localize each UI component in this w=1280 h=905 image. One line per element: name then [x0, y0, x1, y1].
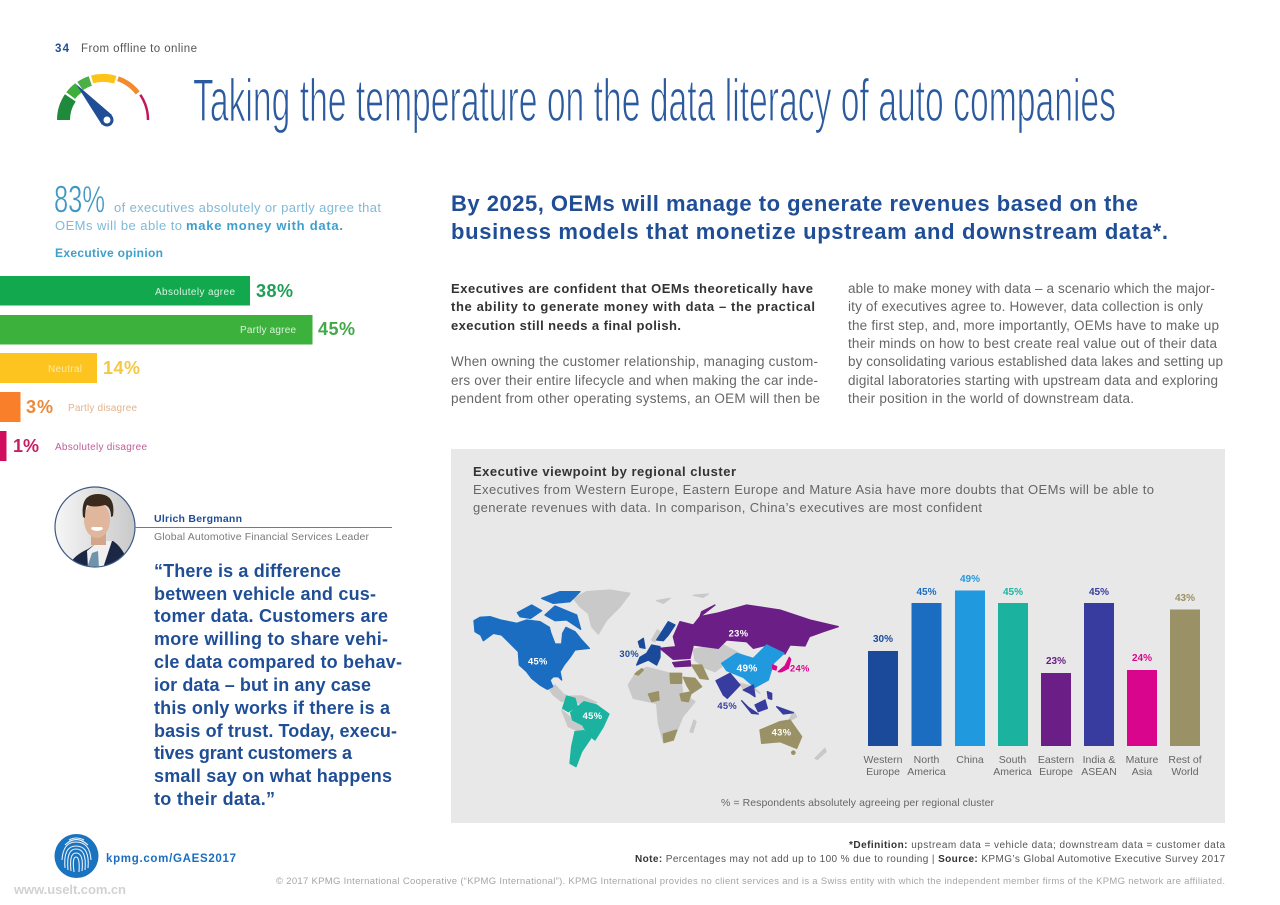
- copyright: © 2017 KPMG International Cooperative (“KPMG International”). KPMG International provides no client services and is a Swiss entity with which the independent member firms of the KPMG network are affiliated.: [276, 876, 1225, 887]
- bar: Mature Asia: [1127, 653, 1157, 746]
- body text: column 1: the ability to generate money with data – the practical: [451, 299, 815, 314]
- map labels: [528, 628, 810, 738]
- bar: Eastern Europe: [1041, 656, 1071, 746]
- body text: column 1: pendent from other operating systems, an OEM will then be: [451, 391, 820, 406]
- rest of world (grey): [547, 590, 826, 759]
- map labels: 49%: [737, 664, 758, 675]
- bar: absolutely disagree: Absolutely disagree: [55, 442, 147, 453]
- bar: Eastern Europe: 23%: [1046, 656, 1066, 667]
- eastern europe and russia: [660, 605, 838, 667]
- bar: partly agree: [0, 315, 355, 344]
- pull quote: between vehicle and cus-: [154, 584, 376, 604]
- pull quote: to their data.”: [154, 789, 275, 809]
- category labels: Europe: [1039, 766, 1073, 778]
- bar: North America: 45%: [916, 587, 937, 598]
- key statistic: OEMs will be able to: [55, 218, 182, 233]
- category labels: America: [907, 766, 946, 778]
- pull quote: basis of trust. Today, execu-: [154, 721, 397, 741]
- body text: column 2: by consolidating various established data lakes and setting up: [848, 354, 1223, 369]
- china: [722, 645, 784, 687]
- bar: partly disagree: 3%: [26, 397, 53, 417]
- world map: [474, 590, 838, 767]
- north america: [474, 592, 589, 689]
- bar: partly agree: Partly agree: [240, 325, 296, 336]
- pull quote: this only works if there is a: [154, 698, 391, 718]
- bar: North America: [912, 587, 942, 746]
- body text: column 2: their position in the world of downstream data.: [848, 391, 1134, 406]
- south america: [563, 696, 609, 767]
- bar: absolutely disagree: [0, 431, 147, 461]
- page header: From offline to online: [81, 43, 197, 55]
- other regions (tan): [635, 665, 802, 754]
- bar: Western Europe: [868, 634, 898, 746]
- category labels: India &: [1083, 754, 1115, 766]
- bar: China: 49%: [960, 574, 980, 585]
- map labels: 45%: [583, 711, 603, 721]
- footnotes: Note: Percentages may not add up to 100 % due to rounding | Source: KPMG’s Global Automotive Executive Survey 2017: [635, 854, 1225, 865]
- main headline: By 2025, OEMs will manage to generate revenues based on the: [451, 191, 1138, 216]
- link: kpmg.com/GAES2017: [106, 853, 236, 865]
- key statistic: make money with data.: [186, 218, 343, 233]
- key statistic: [54, 179, 381, 233]
- bar: partly agree: 45%: [318, 319, 355, 339]
- bar: South America: [998, 587, 1028, 746]
- pull quote: tives grant customers a: [154, 743, 353, 763]
- bar: South America: 45%: [1003, 587, 1023, 598]
- pull quote: more willing to share vehi-: [154, 629, 388, 649]
- bar: absolutely agree: [0, 276, 293, 306]
- icon: fingerprint: [54, 834, 98, 878]
- bar: India and ASEAN: [1084, 587, 1114, 746]
- main headline: business models that monetize upstream and downstream data*.: [451, 219, 1168, 244]
- india and ASEAN: [716, 673, 793, 714]
- bar: Rest of World: [1170, 593, 1200, 746]
- map labels: 43%: [772, 728, 792, 738]
- panel heading: Executives from Western Europe, Eastern Europe and Mature Asia have more doubts that OEMs will be able to: [473, 482, 1154, 497]
- pull quote: tomer data. Customers are: [154, 606, 388, 626]
- bar: partly disagree: Partly disagree: [68, 403, 137, 414]
- body text: column 2: ity of executives agree to. However, data collection is only: [848, 299, 1203, 314]
- portrait: Ulrich Bergmann: [55, 487, 135, 568]
- panel: regional cluster: [451, 449, 1225, 823]
- bar: Western Europe: 30%: [873, 634, 893, 645]
- body text: column 2: able to make money with data – a scenario which the major-: [848, 281, 1215, 296]
- pull quote: ior data – but in any case: [154, 675, 371, 695]
- category labels: Mature: [1126, 754, 1158, 766]
- key statistic: 83%: [54, 179, 105, 221]
- panel heading: generate revenues with data. In comparison, China’s executives are most confident: [473, 500, 982, 515]
- pull quote: small say on what happens: [154, 766, 392, 786]
- category labels: America: [993, 766, 1032, 778]
- footnotes: *Definition: upstream data = vehicle data; downstream data = customer data: [849, 840, 1225, 851]
- map labels: 45%: [528, 657, 548, 667]
- quote attribution: [135, 513, 392, 543]
- chart note: % = Respondents absolutely agreeing per regional cluster: [721, 797, 994, 809]
- footnotes: [635, 840, 1225, 865]
- bar chart: regional clusters: [864, 574, 1202, 778]
- body text: column 1: [451, 281, 820, 406]
- body text: column 2: digital laboratories starting with upstream data and exploring: [848, 373, 1218, 388]
- bar: neutral: 14%: [103, 358, 140, 378]
- bar: Mature Asia: 24%: [1132, 653, 1152, 664]
- pull quote: [154, 561, 402, 809]
- bar: absolutely agree: Absolutely agree: [155, 287, 235, 298]
- category labels: North: [914, 754, 939, 766]
- body text: column 1: execution still needs a final polish.: [451, 318, 681, 333]
- category labels: South: [999, 754, 1026, 766]
- category labels: Eastern: [1038, 754, 1074, 766]
- mature asia: [773, 657, 791, 672]
- page header: 34: [55, 43, 70, 55]
- category labels: World: [1171, 766, 1199, 778]
- category labels: Asia: [1132, 766, 1152, 778]
- map labels: 24%: [790, 664, 810, 674]
- category labels: ASEAN: [1081, 766, 1117, 778]
- category labels: Rest of: [1168, 754, 1202, 766]
- panel heading: Executive viewpoint by regional cluster: [473, 464, 736, 479]
- map labels: 45%: [717, 701, 737, 711]
- bar: India and ASEAN: 45%: [1089, 587, 1109, 598]
- map labels: 23%: [729, 628, 749, 638]
- body text: column 2: the first step, and, more importantly, OEMs have to make up: [848, 318, 1219, 333]
- category labels: [864, 754, 1202, 778]
- bar: Rest of World: 43%: [1175, 593, 1195, 604]
- body text: column 1: When owning the customer relationship, managing custom-: [451, 354, 818, 369]
- bar: absolutely agree: 38%: [256, 281, 293, 301]
- category labels: Western: [864, 754, 903, 766]
- body text: column 2: their minds on how to best create real value out of their data: [848, 336, 1217, 351]
- western europe: [637, 622, 675, 665]
- body text: column 1: Executives are confident that OEMs theoretically have: [451, 281, 813, 296]
- quote attribution: Ulrich Bergmann: [154, 513, 242, 525]
- main headline: [451, 191, 1168, 244]
- heading: executive opinion: Executive opinion: [55, 246, 163, 260]
- bar: neutral: Neutral: [48, 364, 82, 375]
- body text: column 2: [848, 281, 1223, 406]
- category labels: China: [956, 754, 984, 766]
- pull quote: cle data compared to behav-: [154, 652, 402, 672]
- icon: gauge: [64, 78, 148, 125]
- map labels: 30%: [619, 649, 639, 659]
- category labels: Europe: [866, 766, 900, 778]
- bar: neutral: [0, 353, 140, 383]
- panel heading: [473, 464, 1154, 515]
- bar: partly disagree: [0, 392, 137, 422]
- bar: absolutely disagree: 1%: [13, 436, 39, 456]
- bar: China: [955, 574, 985, 746]
- quote attribution: Global Automotive Financial Services Leader: [154, 531, 370, 543]
- body text: column 1: ers over their entire lifecycle and when making the car inde-: [451, 373, 818, 388]
- bar chart: executive opinion: [0, 276, 355, 461]
- watermark: www.uselt.com.cn: [13, 882, 126, 897]
- key statistic: of executives absolutely or partly agree that: [114, 200, 381, 215]
- pull quote: “There is a difference: [154, 561, 341, 581]
